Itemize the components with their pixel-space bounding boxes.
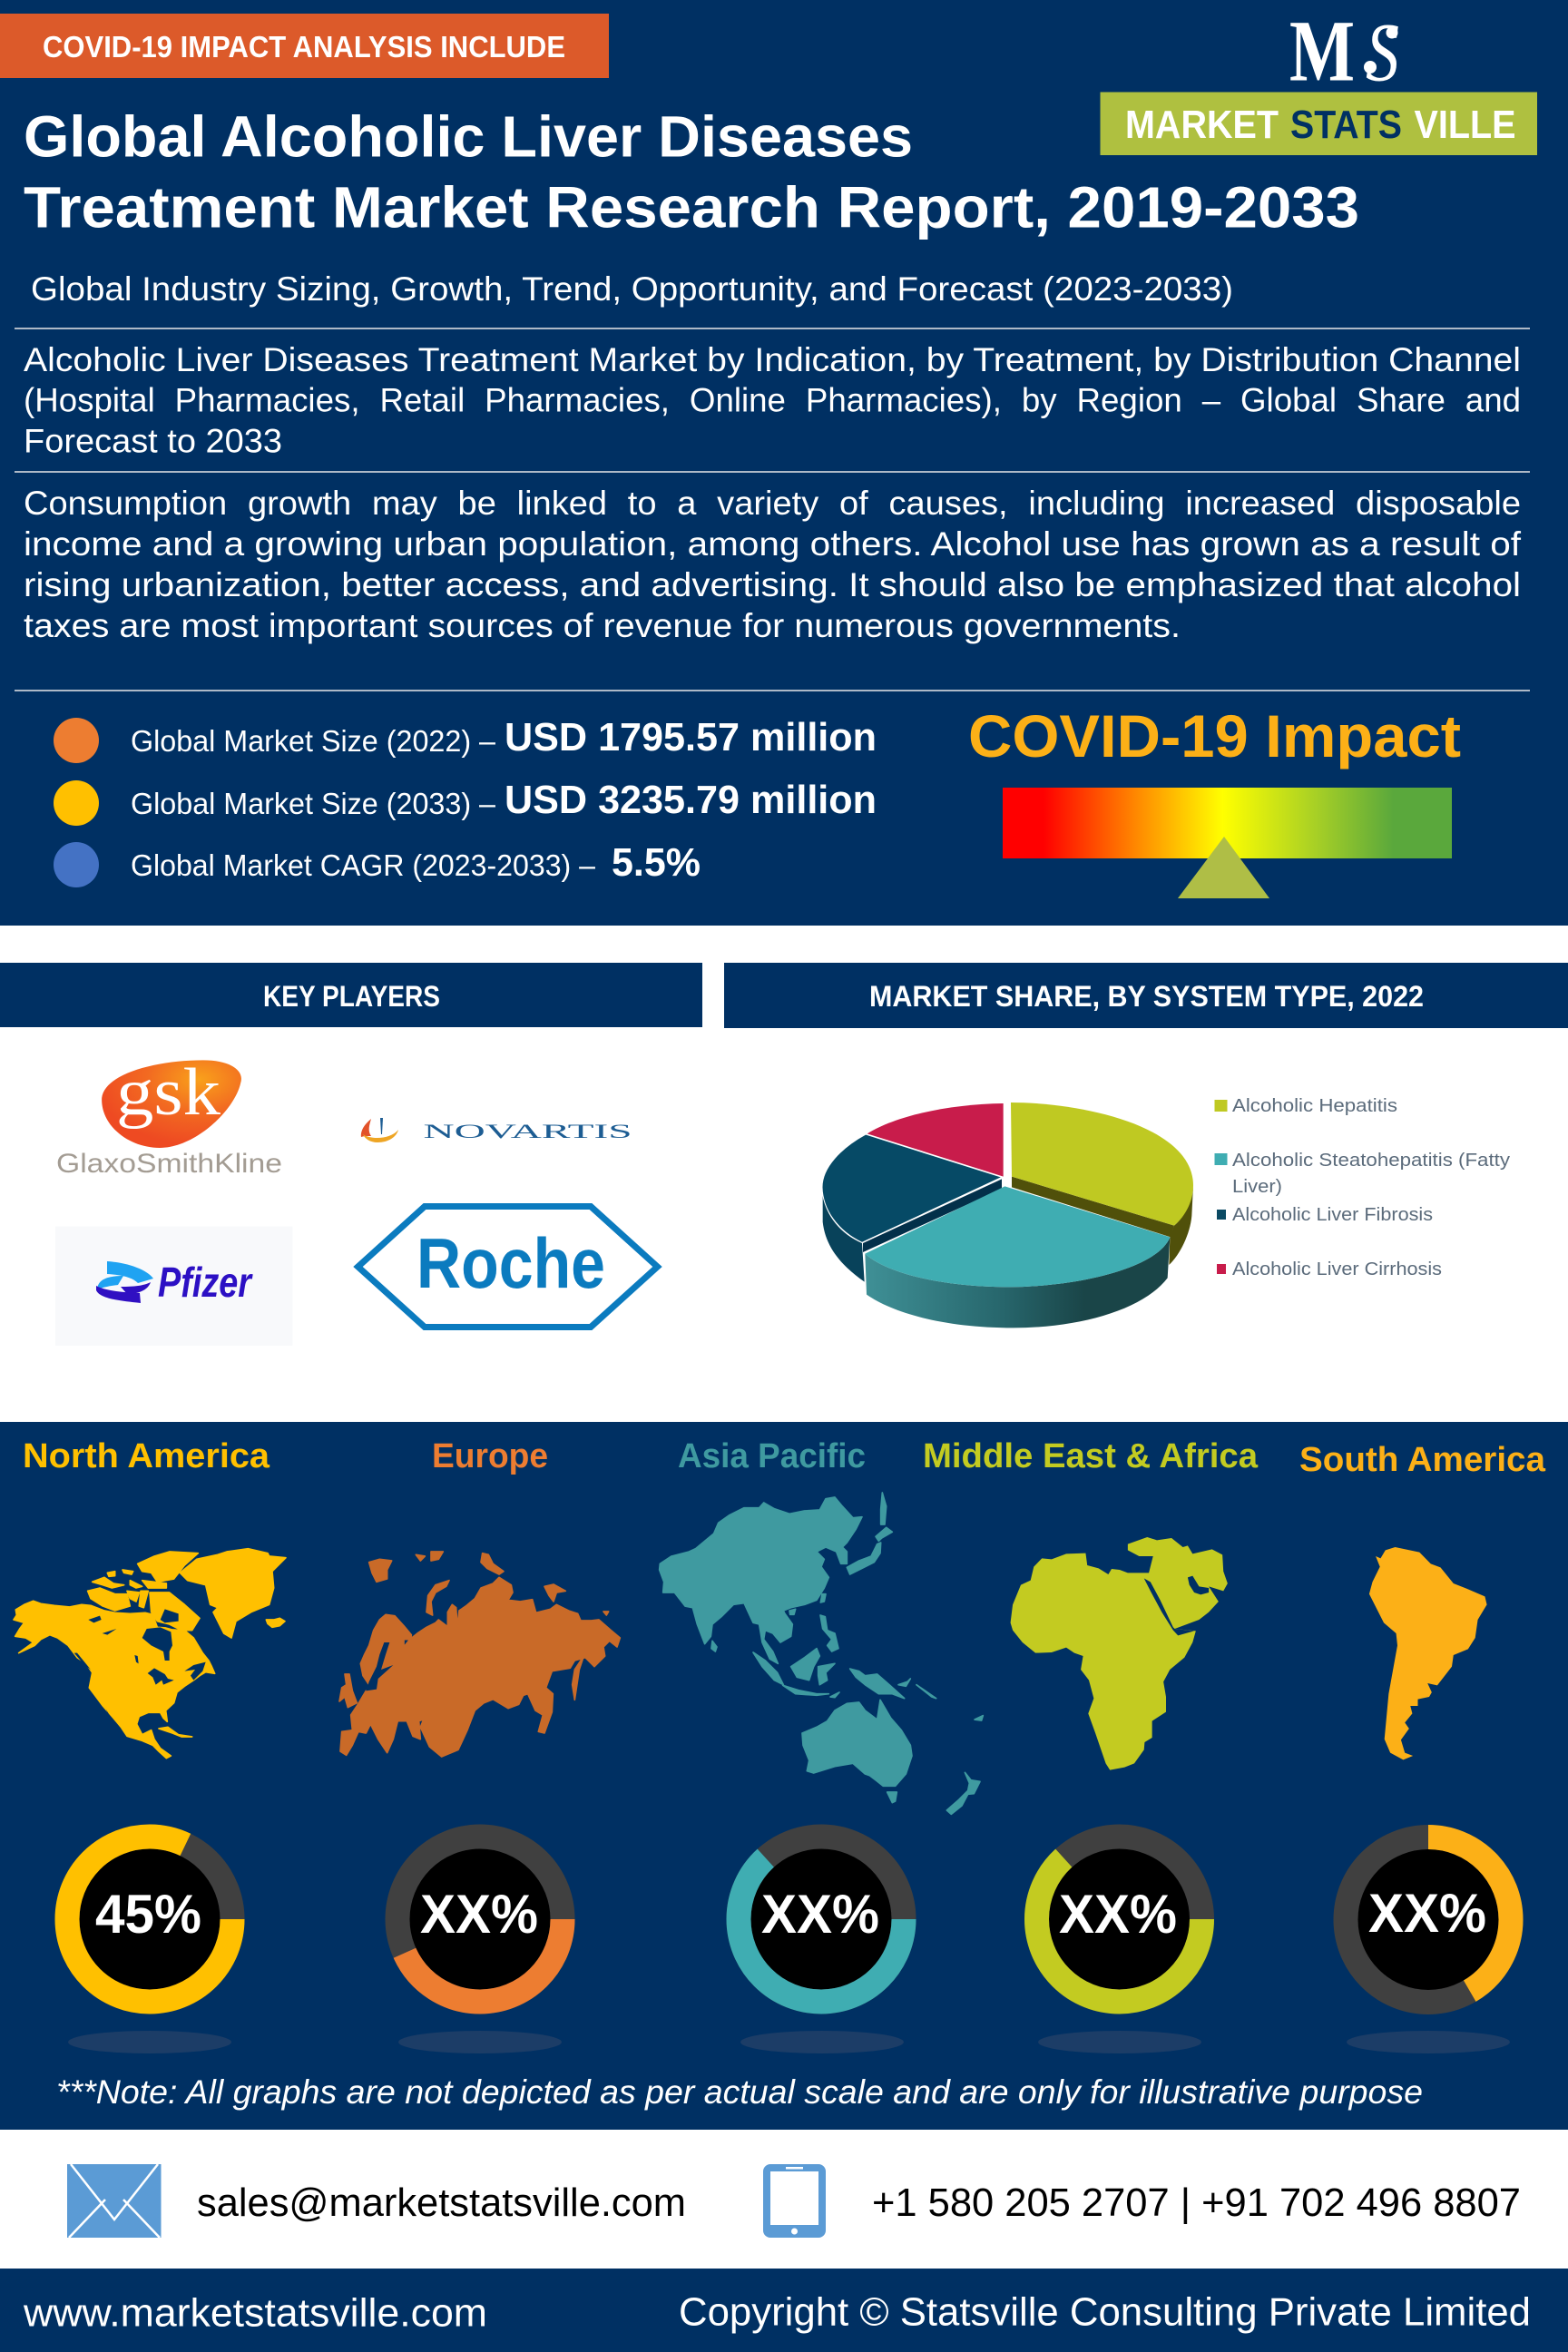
heading: COVID-19 impact: COVID-19 Impact — [968, 702, 1461, 769]
logo: Roche: Roche — [416, 1223, 605, 1303]
stat: market size 2033: Global Market Size (2033) – — [131, 787, 496, 820]
logo: Pfizer — [55, 1227, 292, 1346]
panel: footer: www.marketstatsville.com — [23, 2290, 487, 2336]
label: North America: North America — [23, 1437, 270, 1475]
chart: 3D pie market share — [822, 1102, 1193, 1328]
logo: Market Stats Ville: MARKET — [1125, 103, 1279, 147]
panel: footer — [0, 2269, 1568, 2352]
legend: market share: Alcoholic Steatohepatitis (Fatty — [1232, 1151, 1510, 1171]
donut: North America 45% — [67, 1837, 232, 2053]
donut: Europe — [397, 1837, 563, 2053]
legend: market share: Liver) — [1232, 1177, 1282, 1197]
stat: market size 2022 — [54, 715, 877, 763]
map: Middle East and Africa — [1011, 1537, 1228, 1770]
logo: Market Stats Ville — [1100, 2, 1537, 155]
text block: market scope — [24, 340, 1521, 459]
label: Europe: Europe — [432, 1437, 548, 1475]
legend: market share: Alcoholic Liver Fibrosis — [1232, 1205, 1433, 1225]
legend: market share — [1214, 1096, 1510, 1279]
panel: header background — [0, 0, 1568, 926]
stat: market size 2033 — [54, 778, 877, 826]
map: Europe — [339, 1552, 620, 1757]
legend: market share: Alcoholic Hepatitis — [1232, 1096, 1397, 1116]
donut: North America 45%: 45% — [95, 1884, 201, 1945]
text block: market scope: Alcoholic Liver Diseases Treatment Market by Indication, by Treatment, by Distribution Channel — [24, 340, 1521, 378]
text block: consumption growth — [24, 484, 1522, 644]
panel: footer: Copyright © Statsville Consulting Private Limited — [679, 2290, 1531, 2334]
logo: Novartis: NOVARTIS — [423, 1120, 632, 1142]
donut: Europe: XX% — [420, 1884, 538, 1945]
panel: regions background — [0, 1422, 1568, 2130]
label: South America: South America — [1299, 1441, 1546, 1479]
subtitle: Global Industry Sizing, Growth, Trend, Opportunity, and Forecast (2023-2033) — [31, 270, 1233, 308]
map: Asia Pacific — [660, 1493, 983, 1814]
text block: consumption growth: taxes are most important sources of revenue for numerous governments. — [24, 606, 1181, 644]
header: market share — [724, 963, 1568, 1028]
label: Asia Pacific: Asia Pacific — [678, 1437, 866, 1475]
logo: Novartis — [361, 1118, 632, 1142]
donut: Middle East and Africa — [1036, 1837, 1201, 2053]
logo: Market Stats Ville: M — [1289, 2, 1355, 100]
logo: Pfizer: Pfizer — [158, 1259, 253, 1306]
text block: consumption growth: Consumption growth may be linked to a variety of causes, including increased disposable — [24, 484, 1521, 522]
header: key players — [0, 963, 702, 1027]
title: Treatment Market Research Report, 2019-2033 — [24, 174, 1359, 240]
title — [24, 103, 1359, 240]
label: Middle East & Africa: Middle East & Africa — [923, 1437, 1259, 1475]
contact: phone numbers: +1 580 205 2707 | +91 702 496 8807 — [872, 2180, 1521, 2225]
gauge: impact gradient bar — [1003, 788, 1452, 898]
logo: Market Stats Ville: S — [1366, 5, 1399, 98]
icon: mail — [67, 2164, 162, 2238]
banner: COVID-19 impact analysis: COVID-19 IMPACT ANALYSIS INCLUDE — [43, 30, 565, 64]
contact: email: sales@marketstatsville.com — [197, 2180, 686, 2225]
donut: South America: XX% — [1368, 1883, 1486, 1944]
legend: market share: Alcoholic Liver Cirrhosis — [1232, 1259, 1442, 1279]
logo: GSK: GlaxoSmithKline — [56, 1149, 282, 1179]
map: South America — [1369, 1547, 1487, 1759]
donut: South America — [1346, 1837, 1511, 2053]
logo: Market Stats Ville: STATS — [1290, 103, 1402, 147]
donut: Asia Pacific: XX% — [761, 1884, 879, 1945]
text block: market scope: (Hospital Pharmacies, Retail Pharmacies, Online Pharmacies), by Region – Global Share and — [24, 381, 1521, 419]
stat: market CAGR: Global Market CAGR (2023-2033) – — [131, 848, 596, 882]
text block: consumption growth: income and a growing urban population, among others. Alcohol use has grown as a result of — [24, 524, 1522, 563]
note: ***Note: All graphs are not depicted as per actual scale and are only for illustrative purpose — [56, 2073, 1423, 2111]
title: Global Alcoholic Liver Diseases — [24, 103, 913, 169]
logo: Market Stats Ville: VILLE — [1414, 103, 1515, 147]
stat: market size 2033: USD 3235.79 million — [505, 778, 877, 822]
header: market share: MARKET SHARE, BY SYSTEM TYPE, 2022 — [869, 980, 1424, 1013]
stat: market CAGR: 5.5% — [612, 840, 701, 885]
text block: market scope: Forecast to 2033 — [24, 421, 282, 459]
text block: consumption growth: rising urbanization, better access, and advertising. It should also be emphasized that alcohol — [24, 565, 1521, 603]
map: North America — [14, 1549, 286, 1759]
logo: Roche — [358, 1207, 657, 1327]
stat: market CAGR — [54, 840, 701, 887]
logo: GSK: gsk — [116, 1055, 220, 1130]
stat: market size 2022: USD 1795.57 million — [505, 715, 877, 760]
logo: GSK — [56, 1055, 282, 1179]
banner: COVID-19 impact analysis — [0, 14, 609, 78]
donut: Asia Pacific — [739, 1837, 904, 2053]
stat: market size 2022: Global Market Size (2022) – — [131, 724, 496, 758]
icon: phone — [763, 2164, 826, 2238]
header: key players: KEY PLAYERS — [263, 980, 440, 1013]
donut: Middle East and Africa: XX% — [1059, 1884, 1177, 1945]
